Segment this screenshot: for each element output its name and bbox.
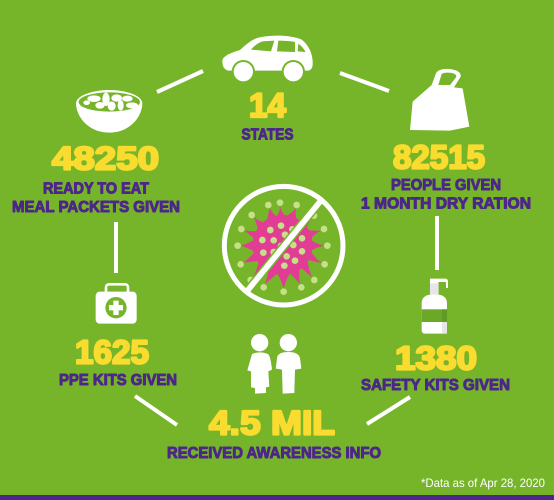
stat: 14 states: STATES	[242, 126, 294, 144]
footnote: *Data as of Apr 28, 2020	[421, 476, 545, 490]
label: people given: PEOPLE GIVEN	[391, 177, 501, 194]
label: ready to eat: READY TO EAT	[43, 180, 149, 198]
stat: 82515: 82515	[393, 138, 485, 176]
virus dots	[234, 199, 331, 295]
label: ppe kits: PPE KITS GIVEN	[59, 372, 177, 389]
connector: bottle to awareness	[367, 397, 410, 424]
connector: car to bag	[340, 73, 389, 91]
stat: 4.5 MIL	[167, 404, 381, 462]
stat: 48250: 48250	[52, 140, 159, 176]
stat: 1380: 1380	[395, 340, 477, 376]
stat: 82515	[361, 138, 531, 212]
slash	[247, 202, 320, 292]
stat: 1625: 1625	[75, 334, 149, 370]
stat: 1380	[361, 340, 510, 394]
label: ready to eat: MEAL PACKETS GIVEN	[12, 199, 180, 216]
stat: 48250	[12, 140, 180, 216]
stat: 1625	[59, 334, 177, 389]
label: safety kits: SAFETY KITS GIVEN	[361, 377, 510, 394]
icon: people	[247, 334, 301, 394]
bottom bar	[0, 495, 554, 500]
stat: 14 states	[242, 87, 294, 144]
connector: bowl to car	[157, 71, 203, 92]
label: people given: 1 MONTH DRY RATION	[361, 196, 531, 212]
stat: 4.5 MIL: 4.5 MIL	[209, 404, 335, 442]
icon: first aid kit	[96, 284, 137, 324]
connector: kit to awareness	[135, 396, 177, 425]
icon: bowl	[76, 90, 142, 133]
label: people given	[361, 177, 531, 212]
icon: sanitizer bottle	[422, 279, 448, 334]
label: ready to eat	[12, 180, 180, 216]
label: received awareness info: RECEIVED AWARENESS INFO	[167, 445, 381, 462]
virus body	[241, 206, 324, 288]
ring	[224, 186, 343, 305]
stat: 14 states: 14	[249, 87, 286, 125]
icon: car	[222, 36, 313, 83]
icon: crossed-out virus	[224, 186, 343, 305]
connector: bowl to kit	[114, 222, 118, 273]
connector: bag to bottle	[435, 216, 439, 270]
icon: bag	[410, 69, 469, 131]
